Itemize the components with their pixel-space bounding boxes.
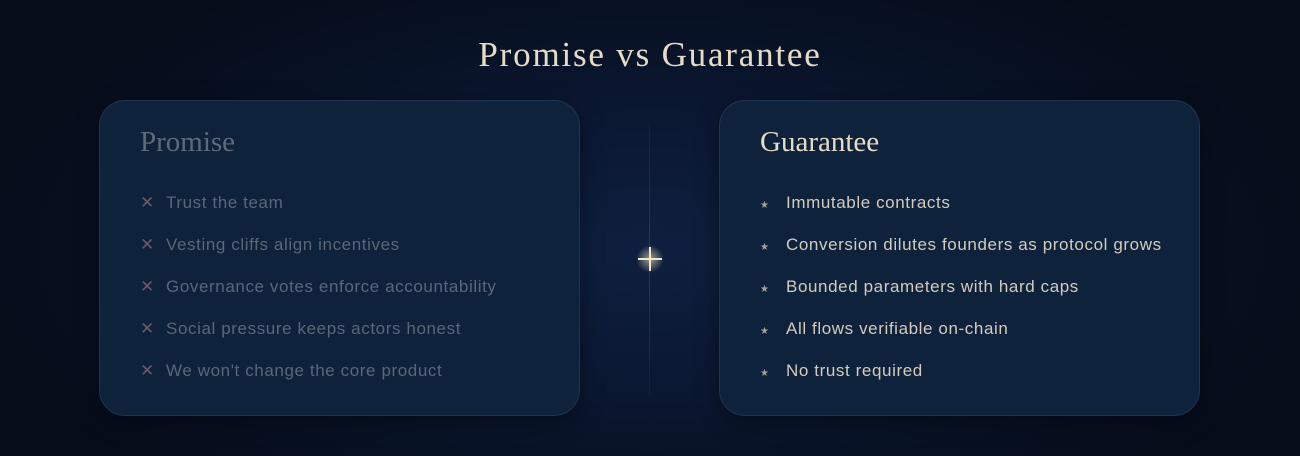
title: Promise vs Guarantee — [478, 35, 822, 74]
panel: promise: ✕ — [140, 361, 154, 380]
panel: promise: ✕ — [140, 235, 154, 254]
panel: guarantee: All flows verifiable on-chain — [786, 319, 1008, 338]
divider line with star — [649, 122, 650, 396]
panel: guarantee: ★ — [760, 326, 769, 337]
panel: promise: We won't change the core product — [166, 361, 442, 380]
panel: guarantee: ★ — [760, 284, 769, 295]
icon: sparkle — [637, 246, 663, 272]
panel: promise: Governance votes enforce accountability — [166, 277, 497, 296]
panel: guarantee: No trust required — [786, 361, 923, 380]
panel: guarantee: Immutable contracts — [786, 193, 950, 212]
heading: guarantee: Guarantee — [760, 126, 879, 158]
panel: guarantee: Bounded parameters with hard caps — [786, 277, 1079, 296]
panel: promise: Trust the team — [166, 193, 283, 212]
panel: guarantee: ★ — [760, 200, 769, 211]
panel: promise: Social pressure keeps actors honest — [166, 319, 461, 338]
panel: promise: ✕ — [140, 193, 154, 212]
panel: promise: ✕ — [140, 319, 154, 338]
panel: guarantee: ★ — [760, 242, 769, 253]
panel: guarantee: ★ — [760, 368, 769, 379]
panel: promise: ✕ — [140, 277, 154, 296]
heading: promise: Promise — [140, 126, 235, 158]
panel: promise — [99, 100, 580, 416]
panel: promise: Vesting cliffs align incentives — [166, 235, 400, 254]
list: promise items — [140, 193, 497, 380]
panel: guarantee — [719, 100, 1200, 416]
panel: guarantee: Conversion dilutes founders as protocol grows — [786, 235, 1162, 254]
list: guarantee items — [760, 193, 1162, 380]
